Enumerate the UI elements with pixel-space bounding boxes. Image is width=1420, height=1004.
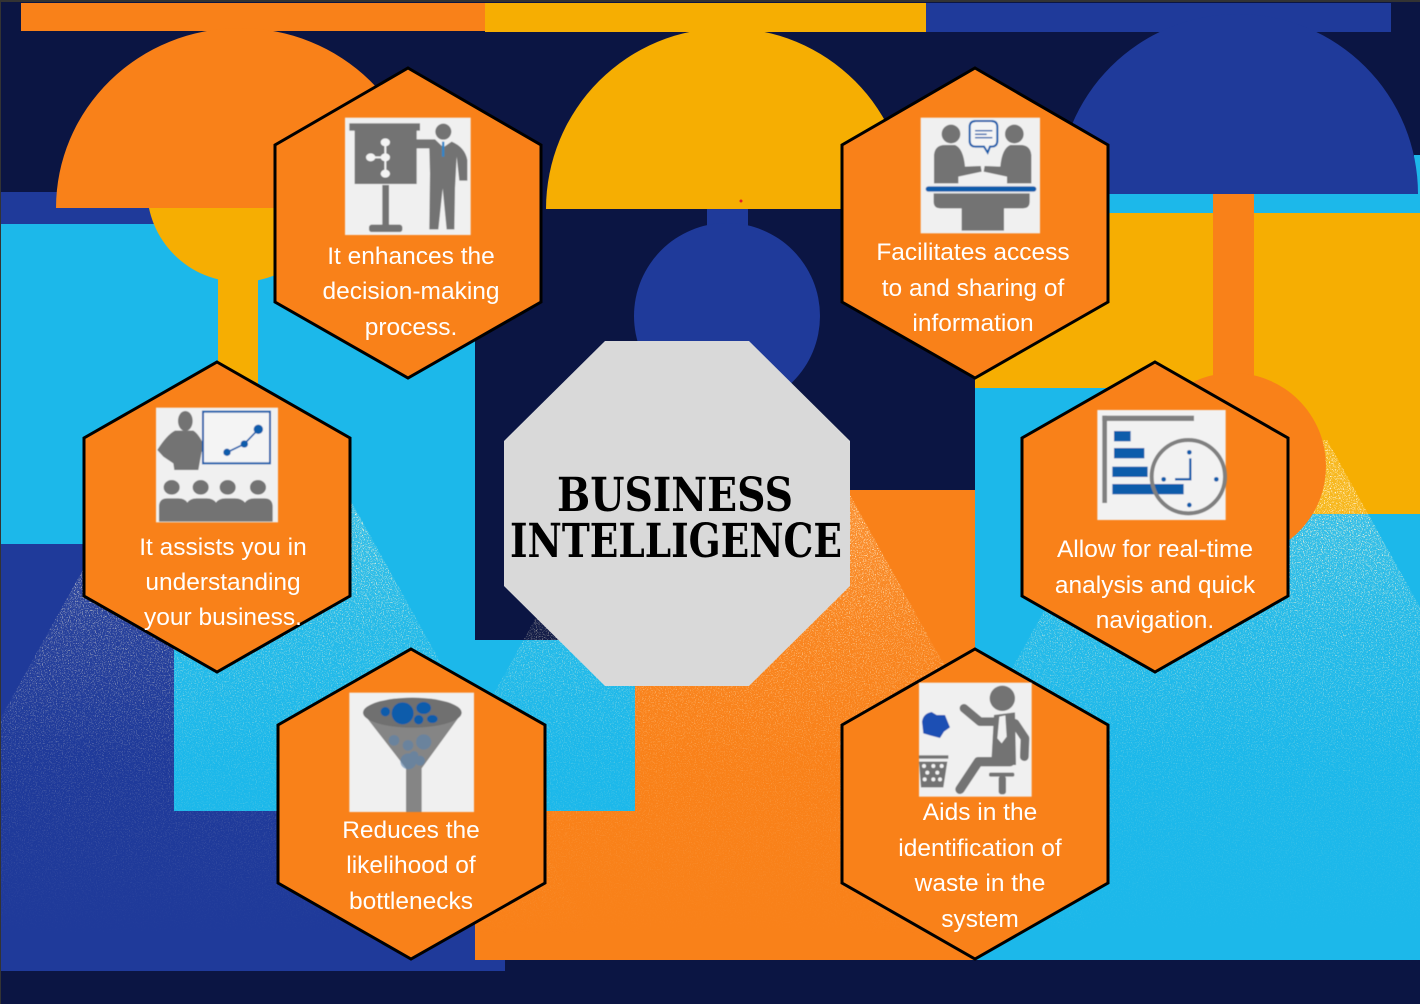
center octagon with title [504, 341, 850, 686]
hexagon: bottlenecks [278, 649, 545, 959]
icon: two people at table [921, 118, 1040, 233]
title: BUSINESS [557, 467, 793, 522]
text: information sharing: information [912, 310, 1034, 337]
text: understanding business: your business. [144, 604, 302, 631]
text: decision-making: decision-making [322, 278, 500, 305]
hexagon: understanding business [84, 362, 350, 672]
icon: funnel [349, 693, 474, 812]
text: waste identification: identification of [898, 835, 1062, 862]
lamp: right [1058, 14, 1418, 559]
lamp: center [546, 28, 908, 409]
hexagon: decision-making [275, 68, 541, 378]
text: bottlenecks: bottlenecks [349, 888, 473, 915]
hexagon: real-time analysis [1022, 362, 1288, 672]
text: waste identification: system [941, 906, 1019, 933]
text: decision-making: It enhances the [327, 243, 495, 270]
hexagon: waste identification [842, 649, 1108, 959]
icon: bar chart and clock [1097, 410, 1226, 520]
text: real-time analysis: analysis and quick [1055, 572, 1256, 599]
text: understanding business: understanding [145, 569, 301, 596]
text: understanding business: It assists you in [139, 534, 307, 561]
text: information sharing: to and sharing of [882, 275, 1064, 302]
icon: person tossing paper into bin [919, 683, 1032, 797]
text: real-time analysis: navigation. [1096, 607, 1214, 634]
hexagon: information sharing [842, 68, 1108, 378]
text: waste identification: Aids in the [923, 799, 1037, 826]
text: information sharing: Facilitates access [876, 239, 1070, 266]
text: real-time analysis: Allow for real-time [1057, 536, 1253, 563]
top bar [21, 3, 1391, 32]
light beams [0, 440, 1420, 960]
text: waste identification: waste in the [914, 870, 1045, 897]
text: decision-making: process. [365, 314, 457, 341]
title: INTELLIGENCE [510, 513, 842, 568]
icon: presenter with chart and audience [156, 408, 278, 522]
icon: presenter with flowchart [345, 118, 471, 235]
text: bottlenecks: likelihood of [346, 852, 476, 879]
lamp: left [56, 28, 424, 400]
text: bottlenecks: Reduces the [342, 817, 480, 844]
